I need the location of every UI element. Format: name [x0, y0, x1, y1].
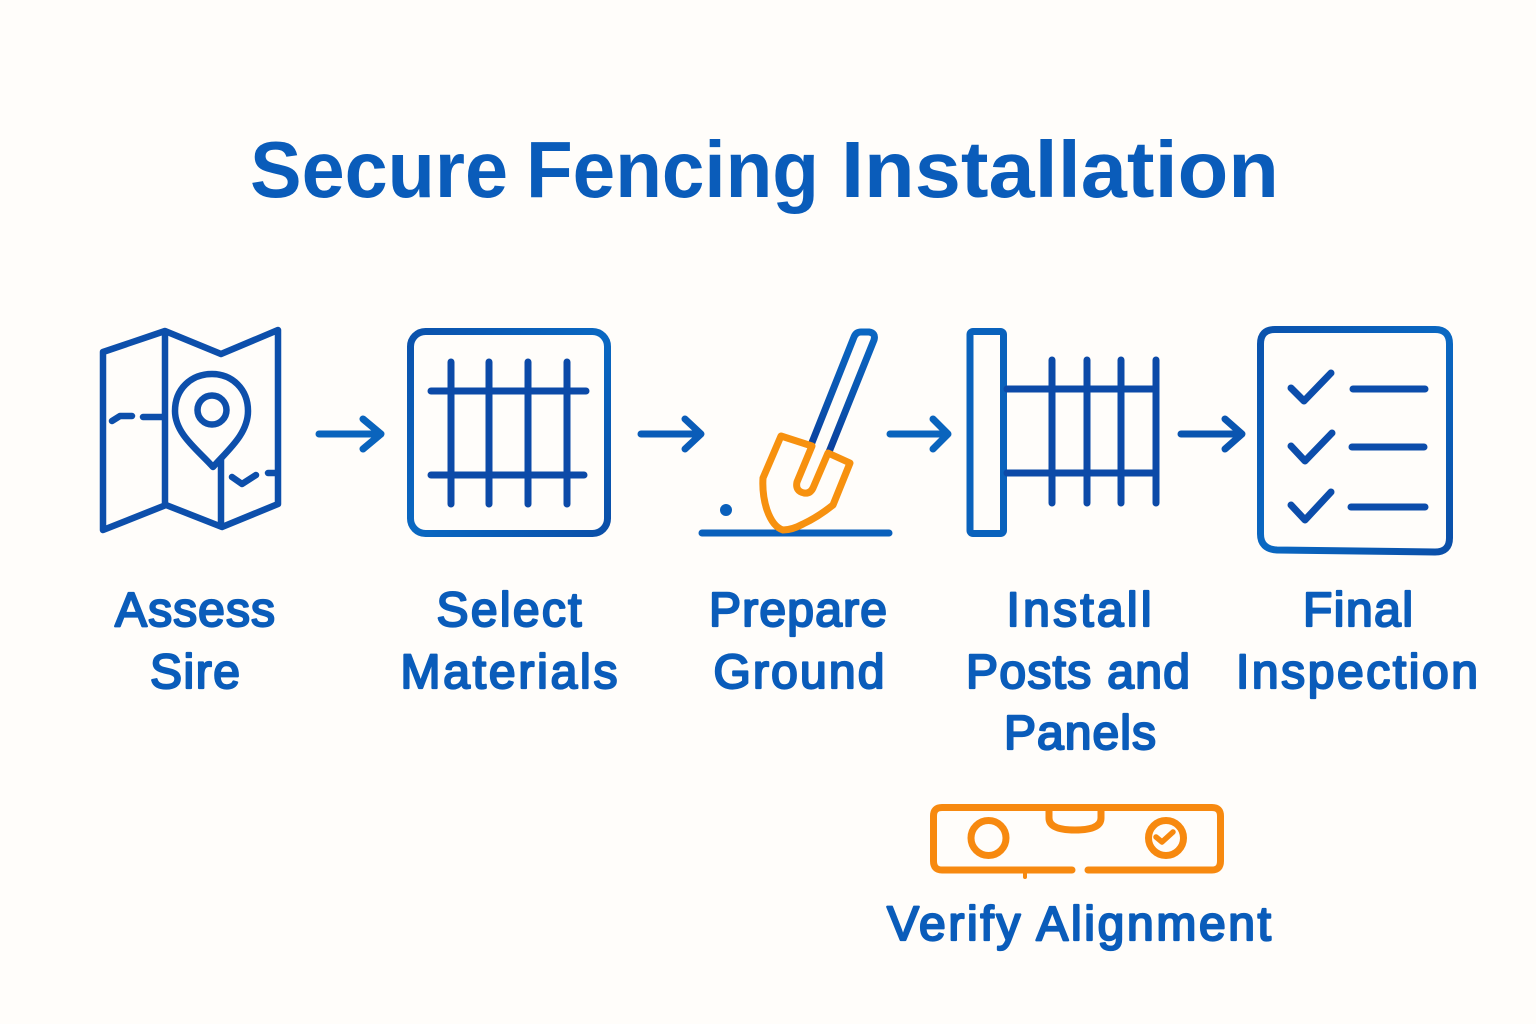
- label: Install Posts and Panels: [966, 584, 1190, 760]
- label: Assess Sire: [115, 584, 275, 699]
- label: Prepare Ground: Ground: [714, 646, 884, 699]
- label: Select Materials: Materials: [400, 646, 618, 699]
- icon: map with location pin: [103, 330, 278, 530]
- label: Select Materials: [400, 584, 618, 699]
- label: Prepare Ground: [709, 584, 887, 699]
- label: Install Posts and Panels: Panels: [1004, 707, 1156, 760]
- icon: shovel: [702, 332, 889, 533]
- title: Secure: [250, 125, 508, 214]
- title: Installation: [841, 125, 1279, 214]
- arrow 3: [890, 419, 948, 449]
- icon: fence panel materials: [410, 332, 608, 534]
- arrow 2: [641, 419, 701, 449]
- label: Assess Sire: Sire: [150, 646, 240, 699]
- arrow 1: [319, 419, 381, 449]
- label: Verify Alignment: Verify Alignment: [887, 898, 1271, 951]
- label: Install Posts and Panels: Posts and: [966, 646, 1190, 699]
- label: Prepare Ground: Prepare: [709, 584, 887, 637]
- icon: spirit level: [934, 808, 1220, 877]
- label: Final Inspection: [1236, 584, 1478, 699]
- label: Final Inspection: Final: [1303, 584, 1413, 637]
- arrow 4: [1181, 419, 1242, 449]
- title: [250, 125, 1279, 214]
- icon: checklist: [1260, 330, 1450, 552]
- icon: fence post and panels: [970, 332, 1156, 534]
- label: Select Materials: Select: [436, 584, 582, 637]
- label: Final Inspection: Inspection: [1236, 646, 1478, 699]
- label: Assess Sire: Assess: [115, 584, 275, 637]
- title: Fencing: [526, 125, 819, 214]
- label: Install Posts and Panels: Install: [1006, 584, 1152, 637]
